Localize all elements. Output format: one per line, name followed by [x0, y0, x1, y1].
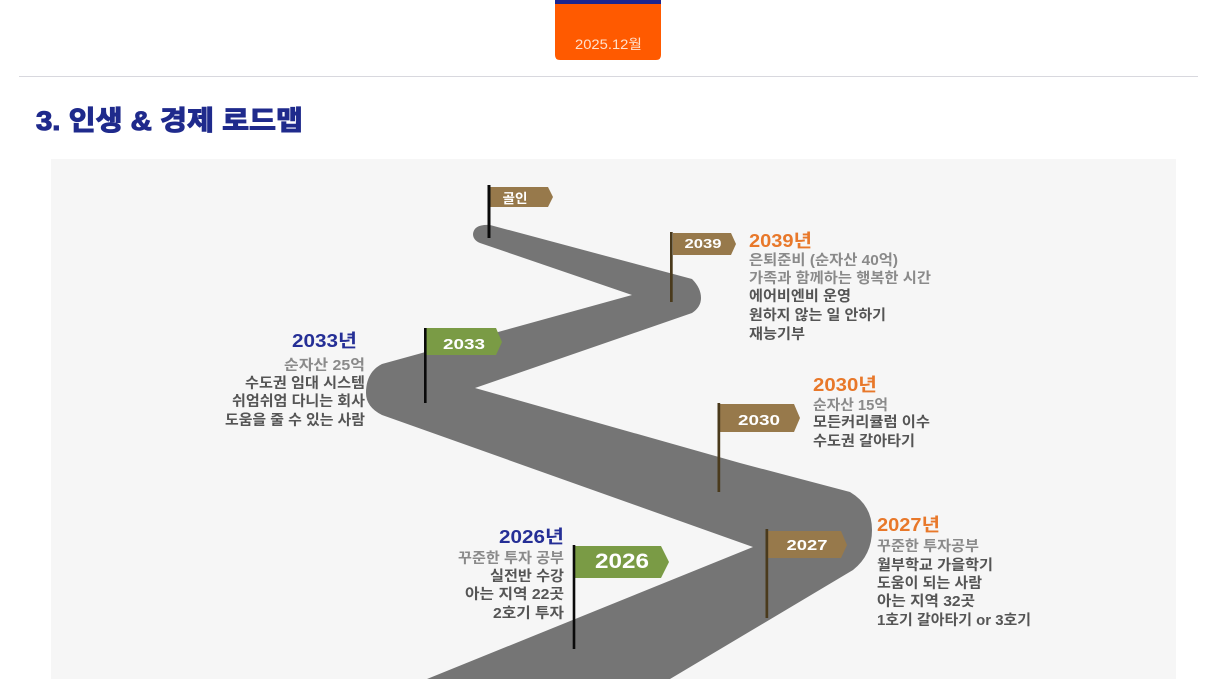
text: 2039 milestone: 재능기부: [749, 326, 805, 343]
flag: 2026: [573, 545, 669, 649]
date tab: 2025.12월: [575, 37, 642, 52]
text: 2027 milestone: 아는 지역 32곳: [877, 593, 975, 610]
text: 2027 milestone: 월부학교 가을학기: [877, 557, 993, 574]
text: 2039 milestone: 은퇴준비 (순자산 40억): [749, 252, 898, 269]
text: 2027 milestone: 꾸준한 투자공부: [877, 538, 979, 555]
text: 2026 milestone: [458, 527, 565, 622]
text: 2026 milestone: 꾸준한 투자 공부: [458, 550, 564, 567]
flag: 2030: [718, 403, 800, 492]
flag: 2039: [670, 232, 736, 302]
text: 2027 milestone: 도움이 되는 사람: [877, 575, 982, 592]
date tab: [555, 0, 661, 60]
text: 2039 milestone: 가족과 함께하는 행복한 시간: [749, 270, 931, 287]
panel: roadmap: [51, 159, 1176, 679]
text: 2033 milestone: 2033년: [292, 331, 357, 351]
flag: goal: 골인: [502, 191, 528, 206]
text: 2039 milestone: [749, 231, 931, 343]
text: 2033 milestone: 쉬엄쉬엄 다니는 회사: [232, 393, 366, 410]
flag: 2039: 2039: [684, 236, 722, 251]
text: 2026 milestone: 실전반 수강: [490, 568, 564, 585]
text: 2030 milestone: 수도권 갈아타기: [813, 433, 915, 450]
text: 2039 milestone: 2039년: [749, 231, 812, 251]
flag: 2030: 2030: [738, 412, 780, 429]
text: 2030 milestone: [813, 375, 930, 450]
flag: 2033: [424, 328, 502, 403]
flag: 2027: 2027: [786, 537, 828, 554]
text: 2030 milestone: 모든커리큘럼 이수: [813, 414, 930, 431]
flag: 2027: [766, 529, 847, 618]
flag: goal: [488, 185, 553, 238]
text: 2027 milestone: [877, 515, 1031, 629]
text: 2033 milestone: 도움을 줄 수 있는 사람: [225, 412, 365, 429]
text: 2026 milestone: 아는 지역 22곳: [465, 586, 564, 603]
text: 2039 milestone: 에어비엔비 운영: [749, 288, 851, 305]
text: 2033 milestone: 순자산 25억: [284, 357, 365, 374]
text: 2030 milestone: 순자산 15억: [813, 397, 888, 414]
text: 2027 milestone: 1호기 갈아타기 or 3호기: [877, 612, 1031, 629]
text: 2039 milestone: 원하지 않는 일 안하기: [749, 307, 886, 324]
text: 2027 milestone: 2027년: [877, 515, 940, 535]
winding road: [366, 225, 872, 679]
text: 2026 milestone: 2026년: [499, 527, 564, 547]
flag: 2033: 2033: [443, 336, 485, 353]
heading: 3. 인생 & 경제 로드맵: [36, 106, 303, 136]
text: 2030 milestone: 2030년: [813, 375, 877, 395]
text: 2026 milestone: 2호기 투자: [493, 605, 565, 622]
text: 2033 milestone: [225, 331, 366, 429]
flag: 2026: 2026: [595, 550, 649, 573]
text: 2033 milestone: 수도권 임대 시스템: [245, 375, 365, 392]
